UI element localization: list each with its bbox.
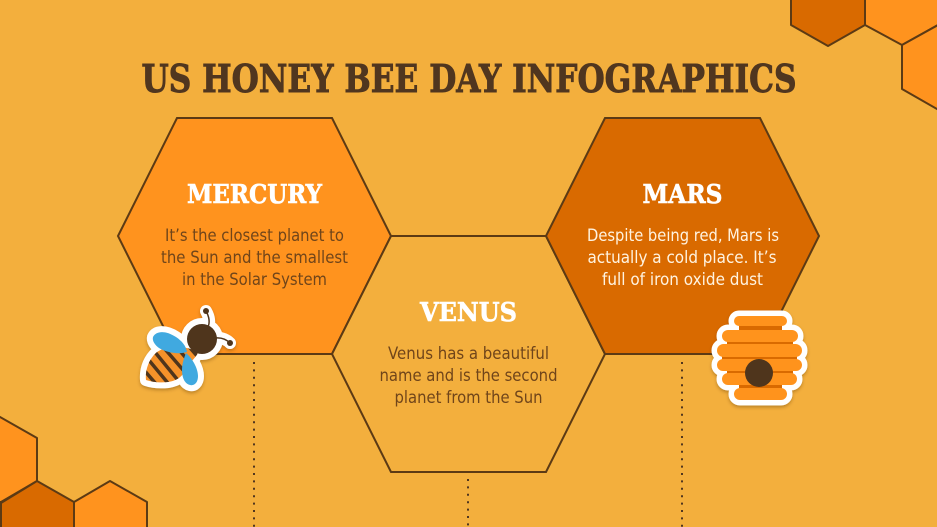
- decoration: bottom left honeycomb: [0, 413, 147, 527]
- text: Mars description: [587, 226, 779, 289]
- dotted line: Venus: [467, 479, 469, 527]
- text: Venus description: [380, 344, 558, 407]
- heading: Mars: MARS: [642, 180, 722, 210]
- panel: Mercury: [118, 118, 391, 354]
- text: Venus description: name and is the second: [380, 366, 558, 385]
- text: Venus description: Venus has a beautiful: [388, 344, 549, 363]
- dotted line: Mars: [681, 362, 683, 527]
- dotted line: Mercury: [253, 362, 255, 527]
- text: Mercury description: in the Solar System: [182, 270, 327, 289]
- decoration: top right honeycomb: [791, 0, 937, 113]
- icon: beehive: [717, 316, 802, 400]
- text: Mars description: Despite being red, Mars is: [587, 226, 779, 245]
- text: Mars description: actually a cold place. It’s: [588, 248, 776, 267]
- text: Mercury description: [161, 226, 348, 289]
- text: Mars description: full of iron oxide dust: [602, 270, 763, 289]
- heading: Venus: VENUS: [419, 298, 517, 328]
- panel: Mars: [546, 118, 819, 354]
- icon: bee: [137, 308, 233, 392]
- text: Mercury description: It’s the closest planet to: [165, 226, 344, 245]
- text: Mercury description: the Sun and the smallest: [161, 248, 348, 267]
- title: US HONEY BEE DAY INFOGRAPHICS: [142, 57, 796, 102]
- panel: Venus: [332, 236, 605, 472]
- text: Venus description: planet from the Sun: [394, 388, 542, 407]
- heading: Mercury: MERCURY: [187, 180, 322, 210]
